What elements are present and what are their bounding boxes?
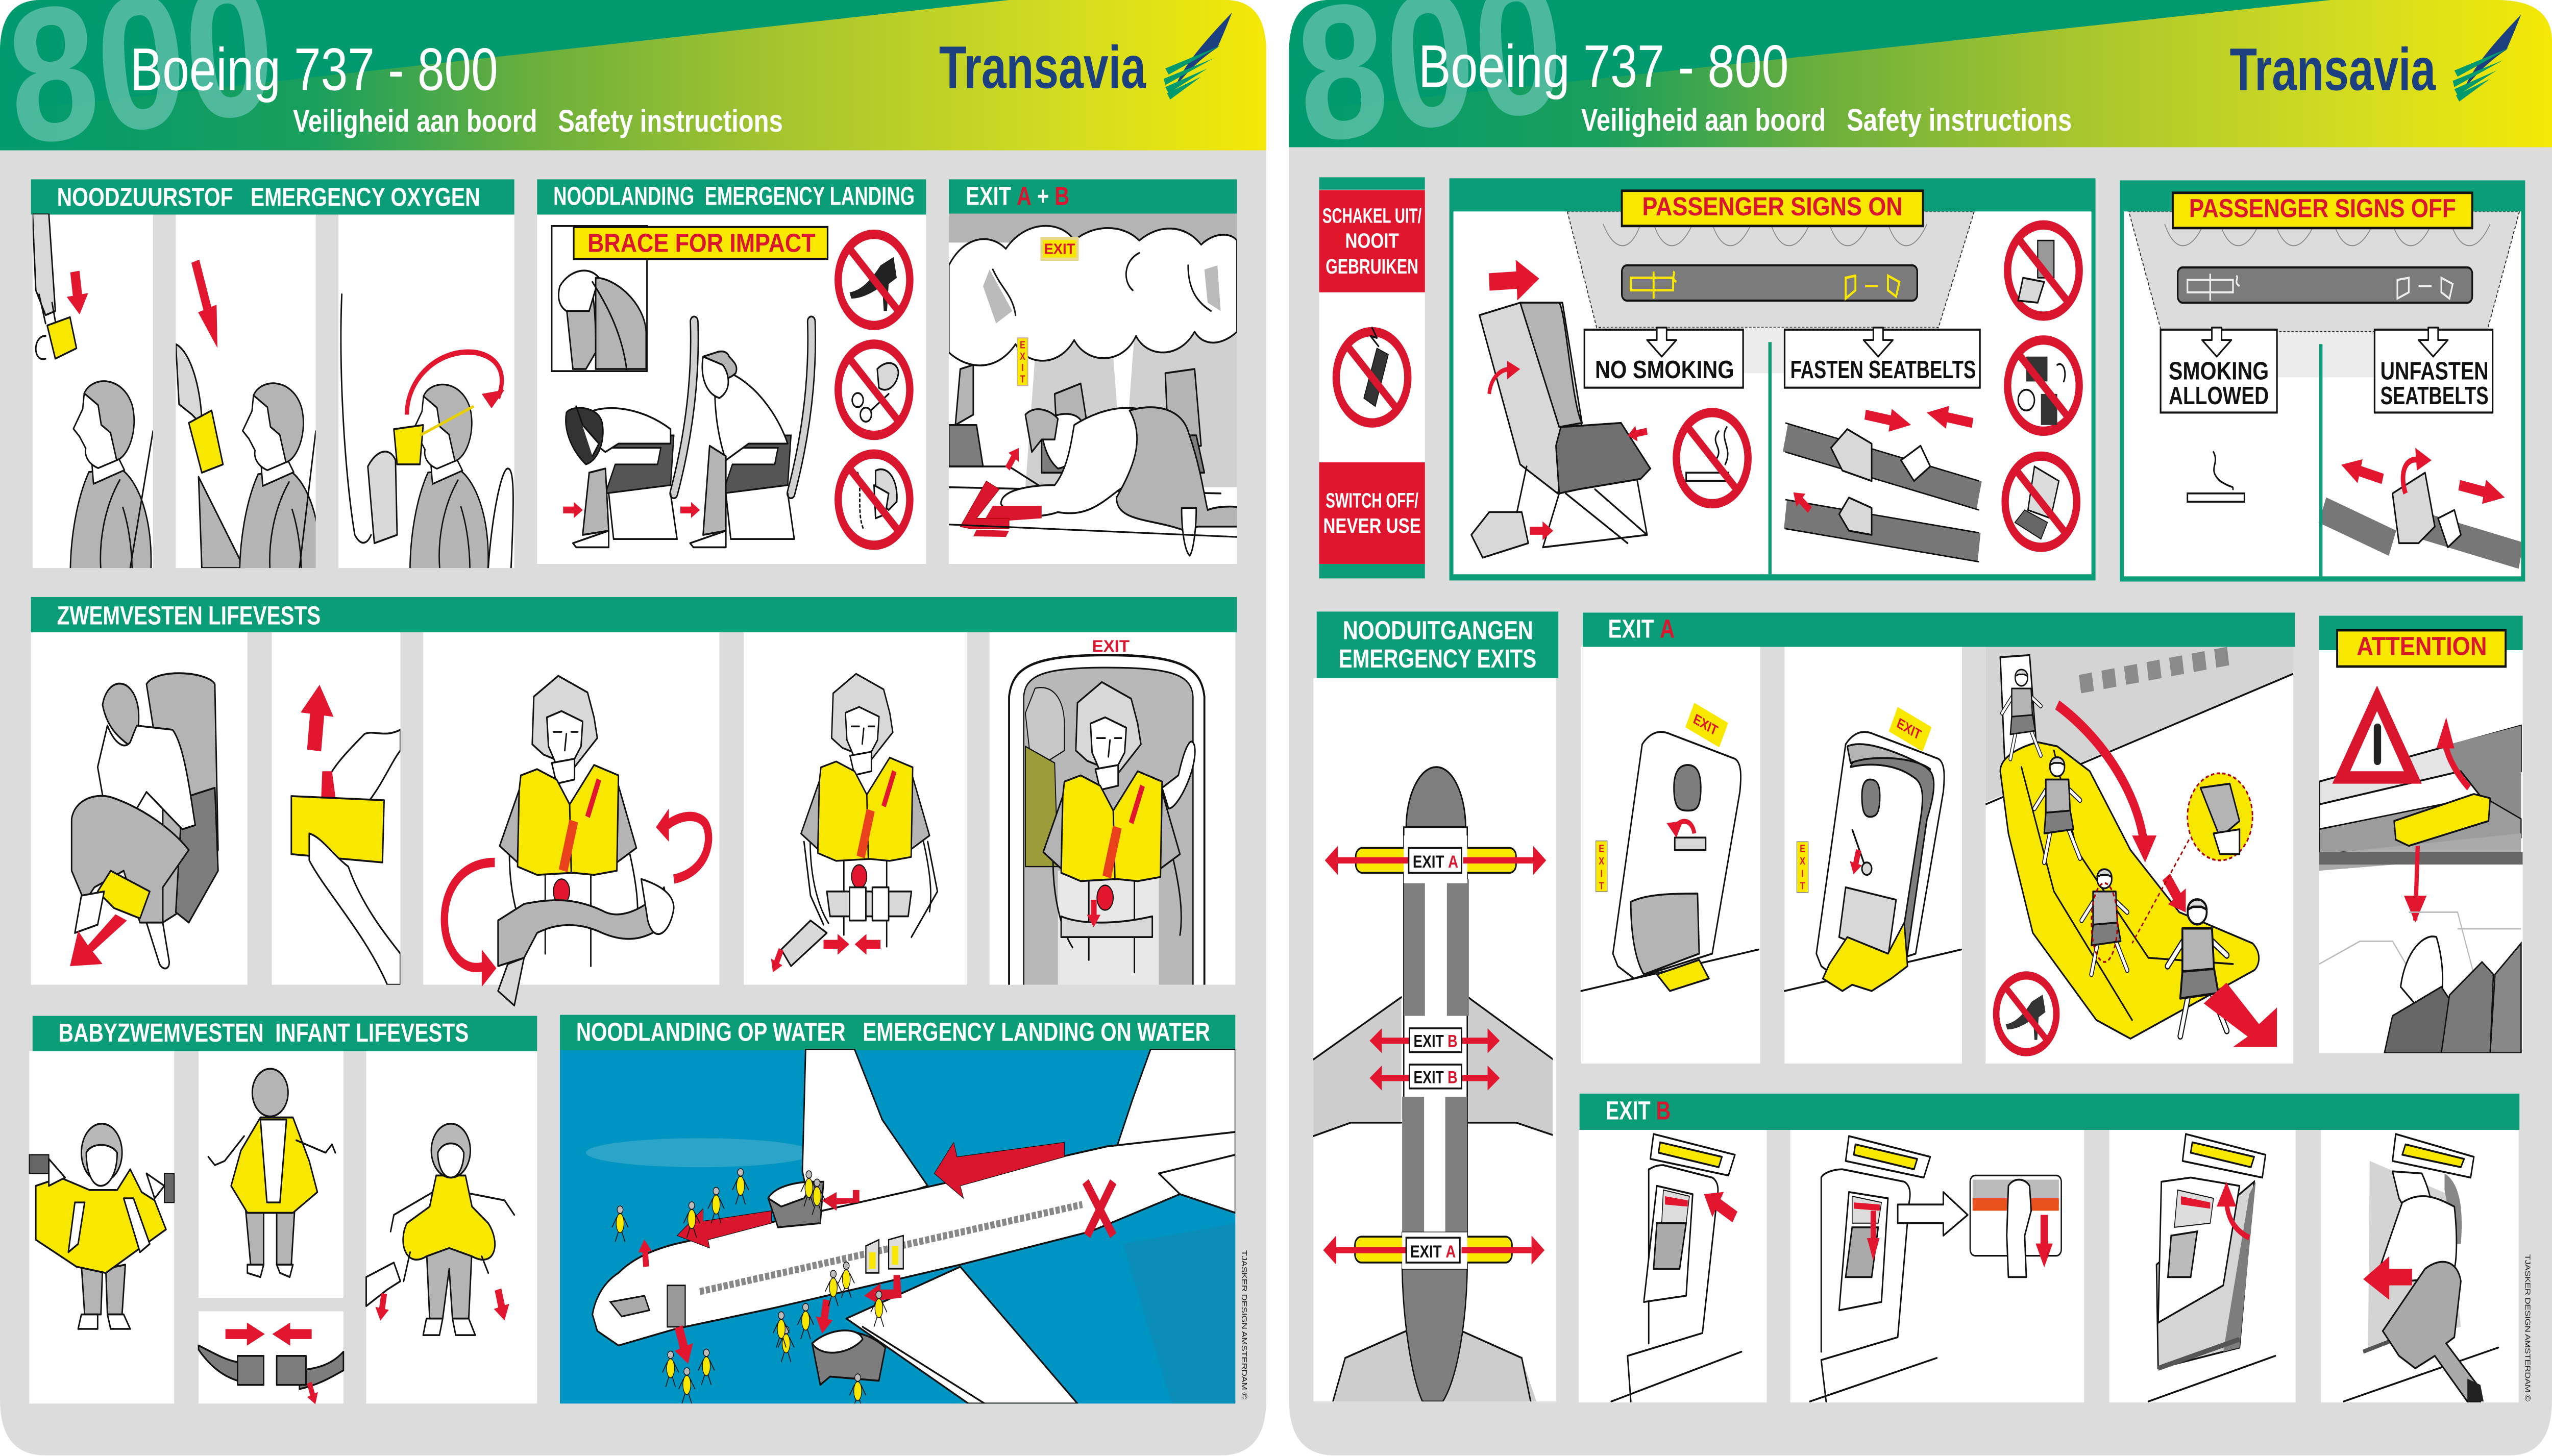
panel: exit A + B	[949, 179, 1240, 564]
passengers on slide	[2002, 670, 2227, 1036]
lifevest step 4: buckle and pull	[767, 674, 938, 976]
sign: unfasten seatbelts	[2374, 328, 2493, 412]
aircraft plan	[1313, 767, 1556, 1401]
inset: brace head	[552, 226, 647, 371]
exit B step 3	[2148, 1134, 2275, 1401]
wing upper	[802, 1049, 928, 1223]
sign: no smoking: NO SMOKING	[1595, 356, 1734, 384]
fuselage	[1406, 767, 1465, 827]
exit B step 4	[2344, 1134, 2498, 1401]
icon: wing logo	[1164, 12, 1232, 100]
panel: passenger signs off	[2120, 180, 2525, 581]
oxygen step 1	[33, 213, 153, 575]
divider	[1769, 342, 1772, 574]
exit B first: EXIT B	[1413, 1031, 1458, 1051]
infant step 1: vest over head	[29, 1124, 174, 1329]
door step 1: EXIT	[1691, 711, 1720, 739]
heading: infant lifevests	[33, 1016, 537, 1051]
panel: emergency exits plan	[1313, 611, 1558, 1401]
red box: schakel uit: SCHAKEL UIT/	[1322, 204, 1421, 227]
divider	[2319, 344, 2322, 576]
lifevest step 2: open pouch	[291, 682, 400, 985]
sign: fasten seatbelts	[1784, 328, 1980, 388]
label: passenger signs on	[1622, 191, 1923, 226]
door step 2: X	[1800, 855, 1806, 867]
wings	[1313, 997, 1556, 1136]
tailplane	[1333, 1331, 1536, 1401]
exit sign vertical: E	[1020, 339, 1025, 351]
Transavia logo: Transavia	[2230, 36, 2436, 103]
icon: no mobile phone	[1336, 328, 1408, 423]
heading: lifevests: ZWEMVESTEN LIFEVESTS	[57, 601, 321, 630]
sign: fasten seatbelts: FASTEN SEATBELTS	[1790, 356, 1976, 384]
left card	[0, 0, 1266, 1455]
overhead panel off	[2129, 211, 2519, 377]
red box: switch off: NEVER USE	[1323, 514, 1421, 537]
inset: pull handle	[1970, 1175, 2062, 1277]
infant step 3: buckle close-up	[199, 1322, 343, 1406]
door step 2: E	[1800, 843, 1805, 854]
seats and passengers bracing	[563, 322, 812, 547]
oxygen step 2	[176, 257, 321, 577]
door step 2: T	[1800, 880, 1805, 892]
sign: smoking allowed	[2161, 328, 2277, 412]
door step 2: I	[1801, 867, 1804, 879]
exit sign top: EXIT	[1044, 241, 1075, 257]
heading: emergency landing: NOODLANDING EMERGENCY LANDING	[553, 182, 915, 210]
subtitle: Veiligheid aan boord Safety instructions	[1581, 102, 2072, 137]
wing lower	[846, 1267, 1077, 1403]
red box: switch off	[1319, 462, 1425, 564]
exit A rear	[1323, 1232, 1544, 1269]
door step 2: EXIT	[1895, 715, 1923, 744]
belts closing	[1785, 401, 1979, 562]
sign: unfasten seatbelts: UNFASTEN	[2381, 357, 2489, 385]
credit left: TJASKER DESIGN AMSTERDAM ©	[1240, 1250, 1248, 1400]
infant step 2: strap between legs	[208, 1069, 335, 1277]
warning triangle	[2333, 685, 2422, 784]
header band right	[1287, 0, 2552, 184]
heading: exit B	[1580, 1094, 2519, 1130]
heading: emergency exits	[1317, 611, 1558, 678]
belt opening	[2322, 448, 2521, 556]
heading: emergency exits: EMERGENCY EXITS	[1339, 644, 1536, 673]
engine upper	[768, 1182, 824, 1227]
callout: brace for impact: BRACE FOR IMPACT	[587, 229, 816, 258]
lifevest step 5: inflate at exit door	[1009, 637, 1205, 991]
overhead bin scene	[2319, 685, 2523, 1053]
door step 1: X	[1599, 855, 1605, 867]
icon: no smoking	[1676, 412, 1748, 504]
red box: schakel uit: GEBRUIKEN	[1326, 255, 1418, 278]
red box: schakel uit: NOOIT	[1345, 229, 1399, 252]
panel: exit B	[1579, 1094, 2519, 1402]
aircraft on water	[586, 1049, 1235, 1410]
cigarette	[2188, 452, 2244, 502]
label: passenger signs off: PASSENGER SIGNS OFF	[2189, 194, 2456, 223]
exit B step 1	[1611, 1134, 1741, 1401]
doors	[667, 1286, 685, 1327]
icon: no laptop	[2005, 456, 2077, 547]
label: attention	[2337, 630, 2506, 667]
heading: infant lifevests: BABYZWEMVESTEN INFANT LIFEVESTS	[59, 1018, 469, 1047]
door step 1: T	[1599, 880, 1604, 892]
heading: exit B: EXIT B	[1606, 1096, 1671, 1125]
exit B first	[1369, 1028, 1500, 1053]
credit right: TJASKER DESIGN AMSTERDAM ©	[2523, 1254, 2532, 1402]
oxygen step 3	[341, 294, 513, 572]
crawl scene	[949, 213, 1240, 556]
label: passenger signs off	[2173, 193, 2472, 228]
panel: exit A	[1581, 612, 2295, 1064]
heading: emergency oxygen: NOODZUURSTOF EMERGENCY OXYGEN	[57, 183, 480, 212]
sign: smoking allowed: SMOKING	[2169, 357, 2269, 385]
panel: emergency landing on water	[560, 1015, 1235, 1410]
red arrows	[934, 1142, 1064, 1198]
icon: no high heels on slide	[1996, 975, 2056, 1052]
stabilizer	[1147, 1153, 1235, 1213]
people in water	[612, 1169, 887, 1410]
heading: exit a + b	[949, 179, 1237, 214]
sign: no smoking	[1584, 328, 1743, 388]
heading: exit a + b: EXIT A + B	[966, 182, 1069, 210]
yellow suitcase	[2394, 794, 2490, 846]
label: attention: ATTENTION	[2357, 632, 2487, 661]
icon: no camera or cd player	[2007, 340, 2079, 431]
rear seats	[2319, 912, 2521, 1053]
label: passenger signs on: PASSENGER SIGNS ON	[1642, 192, 1903, 221]
heading: lifevests	[31, 597, 1237, 632]
icon: no jewellery or sharp objects	[838, 454, 910, 545]
heading: emergency exits: NOODUITGANGEN	[1343, 616, 1533, 645]
panel: lifevests	[31, 597, 1237, 1005]
exit B second: EXIT B	[1413, 1067, 1458, 1087]
door step 3: slide	[1985, 647, 2293, 1052]
exit A front	[1325, 835, 1546, 883]
overhead panel	[1567, 211, 1974, 373]
exit A front: EXIT A	[1413, 852, 1458, 872]
exit B step 2	[1810, 1136, 2062, 1401]
exit label above door: EXIT	[1092, 637, 1130, 656]
panel: emergency oxygen	[31, 179, 514, 577]
panel: emergency landing	[537, 179, 926, 564]
exit sign vertical: X	[1020, 350, 1026, 362]
lifevest step 3: fasten belt around waist	[445, 676, 708, 1005]
lifevest step 1: reach under seat	[70, 673, 218, 969]
panel: passenger signs on	[1450, 178, 2096, 580]
heading: emergency landing on water: NOODLANDING OP WATER EMERGENCY LANDING ON WATER	[576, 1018, 1210, 1046]
heading: emergency oxygen	[31, 179, 514, 214]
title: Boeing 737 - 800	[1418, 33, 1788, 100]
title: Boeing 737 - 800	[130, 36, 498, 103]
red X over rear door	[1086, 1182, 1113, 1236]
red box: schakel uit	[1319, 190, 1425, 292]
header band left	[0, 0, 1266, 151]
door step 2	[1784, 707, 1961, 991]
infant step 4: inflate	[366, 1124, 514, 1335]
right card	[1287, 0, 2552, 1455]
fuselage	[593, 1132, 1235, 1345]
exit sign vertical: T	[1020, 373, 1025, 385]
seat with floatation	[1471, 258, 1650, 558]
door step 1: I	[1601, 867, 1603, 879]
subtitle: Veiligheid aan boord Safety instructions	[293, 103, 783, 138]
panel: attention	[2319, 616, 2523, 1053]
exit sign vertical: I	[1021, 361, 1024, 374]
panel: devices switch off	[1319, 177, 1425, 578]
door step 1	[1581, 703, 1758, 991]
icon: no handheld electronics	[2007, 225, 2079, 316]
Transavia logo: Transavia	[939, 34, 1146, 101]
panel: infant lifevests	[29, 1016, 537, 1406]
exit B second	[1369, 1065, 1500, 1091]
exit A rear: EXIT A	[1410, 1242, 1456, 1262]
icon: no dentures or glasses	[838, 344, 910, 435]
icon: no high heels	[838, 234, 910, 326]
icon: wing logo	[2452, 14, 2521, 102]
exit sign top	[1042, 238, 1077, 259]
exit sign vertical	[1017, 338, 1028, 386]
sign: unfasten seatbelts: SEATBELTS	[2381, 382, 2489, 410]
sign: smoking allowed: ALLOWED	[2169, 382, 2269, 410]
door step 1: E	[1599, 843, 1604, 854]
heading: exit A: EXIT A	[1608, 614, 1675, 644]
heading: exit A	[1583, 612, 2295, 647]
red box: switch off: SWITCH OFF/	[1326, 489, 1418, 512]
engine lower	[812, 1331, 886, 1385]
tail fin	[1115, 1049, 1235, 1153]
